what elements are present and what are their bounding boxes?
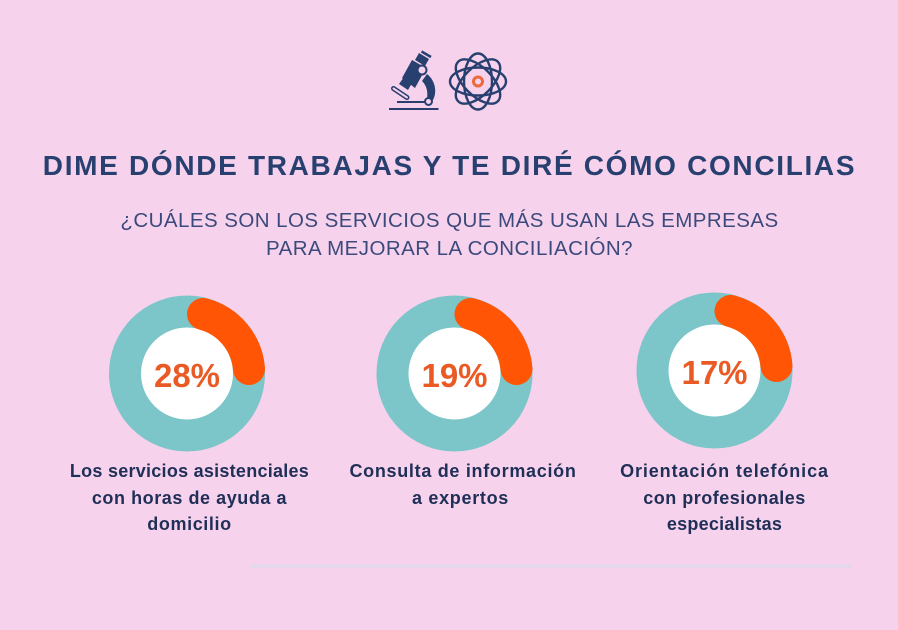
label: servicios asistenciales [70, 461, 309, 534]
donut chart: 19%: 19% [421, 357, 488, 394]
subtitle: ¿CUÁLES SON LOS SERVICIOS QUE MÁS USAN LAS EMPRESAS [120, 209, 779, 232]
label: servicios asistenciales: Los servicios asistenciales [70, 461, 309, 481]
icon: microscope [389, 52, 438, 109]
icon: atom [448, 52, 508, 111]
donut chart: 17%: 17% [681, 354, 748, 391]
subtitle [120, 209, 779, 260]
label: consulta de información: a expertos [412, 488, 509, 508]
label: orientación telefónica [620, 461, 829, 534]
label: servicios asistenciales: con horas de ayuda a [92, 488, 287, 508]
label: servicios asistenciales: domicilio [147, 514, 232, 534]
label: consulta de información [349, 461, 577, 508]
icons: microscope and atom [389, 50, 508, 111]
label: orientación telefónica: Orientación telefónica [620, 461, 829, 481]
label: orientación telefónica: con profesionales [643, 488, 806, 508]
subtitle: PARA MEJORAR LA CONCILIACIÓN? [266, 237, 633, 260]
donut chart: 28%: 28% [154, 357, 220, 394]
title: DIME DÓNDE TRABAJAS Y TE DIRÉ CÓMO CONCILIAS [43, 150, 856, 181]
label: orientación telefónica: especialistas [667, 514, 782, 534]
label: consulta de información: Consulta de información [349, 461, 577, 481]
footer line [250, 564, 852, 568]
